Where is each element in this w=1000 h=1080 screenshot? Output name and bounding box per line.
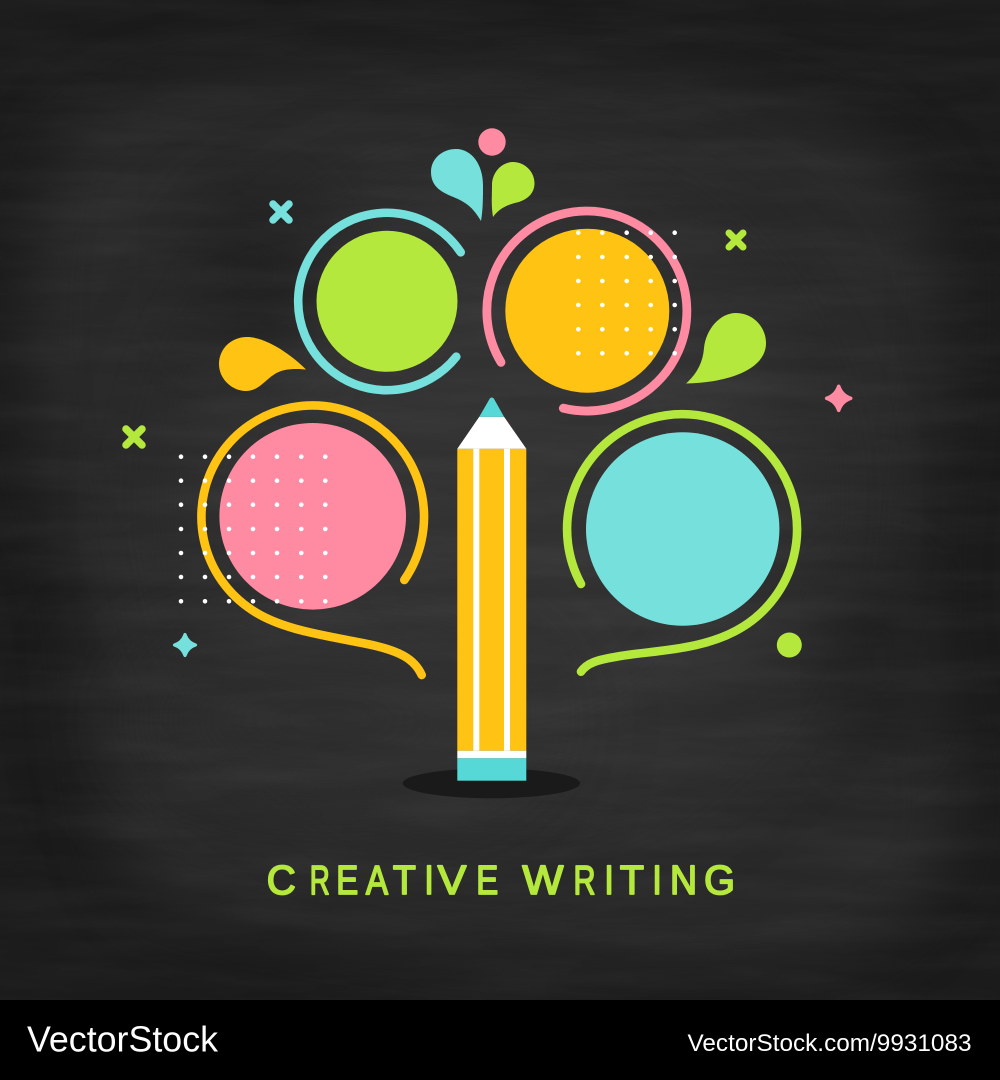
decorative drop: lime small (492, 162, 534, 217)
title: V (438, 857, 467, 903)
dot grid over pink circle (181, 457, 325, 601)
pencil body (457, 449, 526, 751)
icon: sparkle teal (174, 634, 196, 656)
lime circle with teal ring (298, 213, 461, 390)
decorative dot: pink (478, 128, 506, 156)
title: C (267, 857, 296, 903)
pencil (457, 398, 526, 781)
title: I (424, 857, 434, 903)
decorative drop: lime large (686, 313, 766, 384)
title: A (366, 857, 389, 903)
footer image reference: VectorStock.com/9931083 (688, 1030, 972, 1057)
pencil eraser (457, 758, 526, 781)
decorative drop: teal (431, 149, 483, 221)
icon: sparkle pink (827, 386, 851, 410)
pencil ferrule (457, 751, 526, 758)
icon: cross lime left (126, 429, 142, 445)
pencil stripes (473, 449, 510, 751)
decorative dot: lime (777, 632, 802, 658)
title: W (522, 857, 564, 903)
title: R (574, 857, 596, 903)
dot grid over orange circle (578, 233, 675, 353)
footer bar (0, 1000, 1000, 1080)
title: E (476, 857, 498, 903)
teal circle with lime ring and tail (567, 414, 797, 672)
pencil wood tip (457, 417, 526, 449)
title: N (670, 857, 697, 903)
orange circle with pink ring (487, 211, 687, 411)
icon: cross teal (273, 204, 289, 220)
pencil shadow (403, 768, 580, 798)
title: I (604, 857, 614, 903)
pink circle with orange ring and tail (201, 405, 424, 675)
title: T (620, 857, 644, 903)
title: G (704, 857, 735, 903)
title: I (652, 857, 662, 903)
title: E (336, 857, 358, 903)
title: R (310, 857, 330, 903)
title: T (393, 857, 416, 903)
footer brand: VectorStock (27, 1018, 219, 1060)
decorative drop: orange (219, 337, 306, 391)
pencil lead (479, 398, 504, 417)
icon: cross lime upper right (729, 233, 743, 247)
